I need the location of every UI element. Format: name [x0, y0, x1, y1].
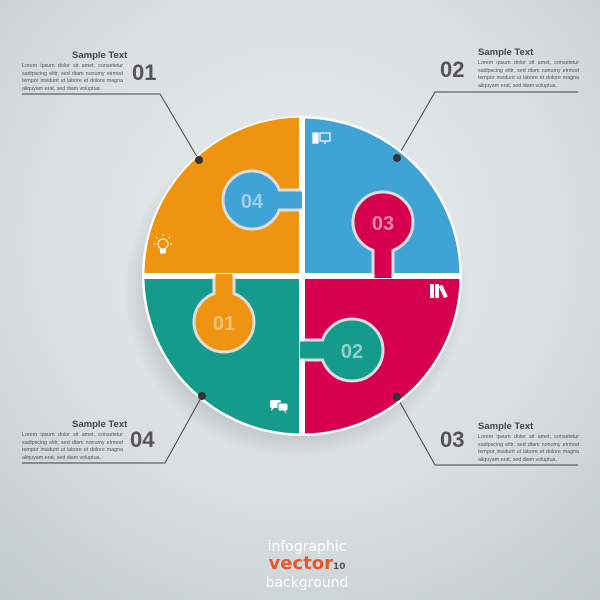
knob 01 orange	[194, 274, 254, 352]
icon: lightbulb	[154, 234, 172, 253]
piece: teal	[144, 279, 299, 434]
icon: computer	[313, 133, 330, 144]
icon: speech bubbles	[270, 400, 288, 414]
number 04: 04	[130, 427, 154, 452]
logo	[266, 539, 348, 591]
icon: folders	[430, 284, 448, 298]
connector lines	[22, 92, 578, 465]
logo: background	[266, 575, 348, 591]
knob 03 red	[353, 192, 413, 278]
piece: red	[305, 279, 460, 434]
heading 02: Sample Text	[478, 47, 533, 58]
dots	[195, 154, 401, 401]
knob 02 teal: 02	[341, 341, 363, 363]
knob 01 orange: 01	[213, 313, 235, 335]
number 03: 03	[440, 427, 464, 452]
callout 03	[440, 421, 579, 462]
knob 03 red: 03	[372, 213, 394, 235]
logo: infographic	[268, 539, 346, 555]
text 04: Lorem ipsum dolor sit amet, consetetur sadipscing elitr, sed diam nonumy eirmod tempor invidunt ut labore et dolore magna aliquyam erat, sed diam voluptua.	[22, 432, 123, 460]
number 01: 01	[132, 60, 156, 85]
heading 01: Sample Text	[72, 50, 127, 61]
text 01: Lorem ipsum dolor sit amet, consetetur sadipscing elitr, sed diam nonumy eirmod tempor invidunt ut labore et dolore magna aliquyam erat, sed diam voluptua.	[22, 63, 123, 92]
knob 04 blue: 04	[241, 191, 264, 213]
piece: blue	[305, 118, 460, 273]
text 03: Lorem ipsum dolor sit amet, consetetur sadipscing elitr, sed diam nonumy eirmod tempor invidunt ut labore et dolore magna aliquyam erat, sed diam voluptua.	[478, 434, 579, 462]
knob 04 blue	[223, 171, 302, 229]
heading 03: Sample Text	[478, 421, 533, 432]
number 02: 02	[440, 57, 464, 82]
text 02: Lorem ipsum dolor sit amet, consetetur sadipscing elitr, sed diam nonumy eirmod tempor invidunt ut labore et dolore magna aliquyam erat, sed diam voluptua.	[478, 60, 579, 88]
piece: orange	[144, 118, 302, 273]
logo: vector10	[268, 553, 346, 574]
callout 04	[22, 419, 154, 460]
heading 04: Sample Text	[72, 419, 127, 430]
callout 02	[440, 47, 579, 88]
callout 01	[22, 50, 156, 92]
knob 02 teal	[300, 319, 383, 381]
